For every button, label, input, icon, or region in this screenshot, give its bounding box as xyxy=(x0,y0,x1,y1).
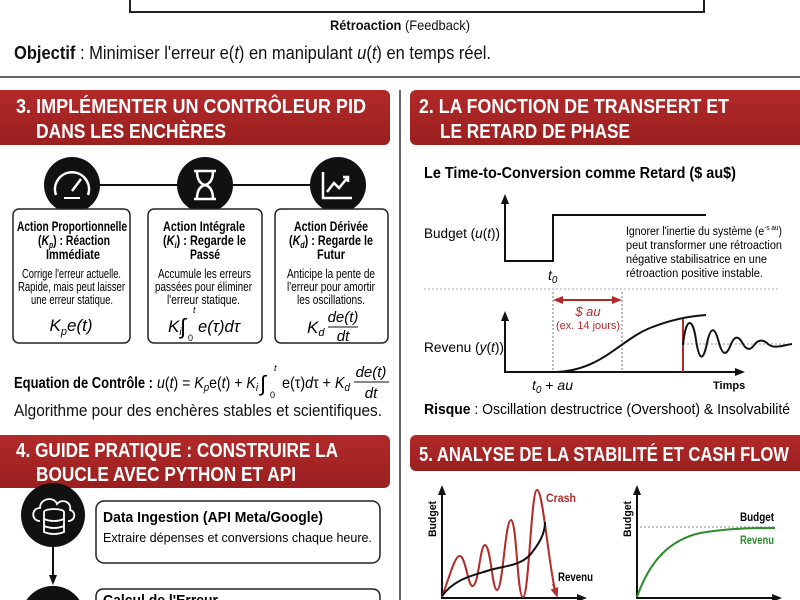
note text xyxy=(626,225,782,280)
card: integral: ) : Regarde le xyxy=(177,232,246,248)
icon: chart up xyxy=(310,157,366,213)
stable chart xyxy=(622,490,777,599)
equation of control: t) + K xyxy=(222,375,257,392)
revenue chart: t xyxy=(532,377,536,393)
card: integral: ∫ xyxy=(178,314,188,339)
heading: section 4: 4. GUIDE PRATIQUE : CONSTRUIRE LA xyxy=(16,440,338,462)
budget step chart xyxy=(424,199,706,286)
card: derivative: l'erreur pour amortir xyxy=(287,280,375,294)
heading: section 4: BOUCLE AVEC PYTHON ET API xyxy=(36,464,296,486)
card: proportional: K xyxy=(50,316,61,335)
arrow down xyxy=(52,547,54,580)
card: derivative: ) : Regarde le xyxy=(305,232,373,248)
card: proportional: e(t) xyxy=(67,316,92,335)
card: derivative: Futur xyxy=(317,246,345,262)
panel: stability analysis xyxy=(427,490,777,599)
equation of control: u(t) = K xyxy=(157,375,205,392)
card: integral: 0 xyxy=(188,333,193,343)
heading: section 2: LE RETARD DE PHASE xyxy=(440,121,630,143)
card: integral: Passé xyxy=(190,246,220,262)
card: derivative: Anticipe la pente de xyxy=(287,267,375,281)
card: data ingestion: Extraire dépenses et conversions chaque heure. xyxy=(103,530,372,545)
equation of control: i xyxy=(256,382,258,394)
card: proportional: p xyxy=(48,240,54,250)
equation of control: ∫ xyxy=(258,371,268,396)
card: proportional: p xyxy=(60,326,67,338)
card: proportional: Immédiate xyxy=(46,246,100,262)
equation of control: e(τ)dτ + K xyxy=(282,375,346,392)
card: derivative: (K xyxy=(289,232,303,248)
card: proportional xyxy=(13,209,130,343)
unstable chart: Crash xyxy=(546,491,576,505)
equation of control: p xyxy=(203,382,209,394)
card: integral xyxy=(148,209,262,343)
panel: PID controller xyxy=(13,157,388,345)
equation of control: t xyxy=(274,363,277,373)
card: data ingestion xyxy=(96,501,380,563)
card: derivative xyxy=(275,209,388,345)
revenue chart: 0 xyxy=(536,385,542,396)
heading: section 4 xyxy=(0,435,390,488)
card: proportional: Corrige l'erreur actuelle. xyxy=(22,267,121,281)
equation of control xyxy=(14,363,389,402)
card: derivative: K xyxy=(307,318,318,337)
unstable chart: Budget xyxy=(427,501,439,537)
card: proportional: Action Proportionnelle xyxy=(17,218,127,234)
card: proportional: (K xyxy=(38,232,52,248)
card: derivative: Action Dérivée xyxy=(294,218,368,234)
icon: cloud database xyxy=(21,483,85,547)
stable chart: Budget xyxy=(622,501,634,537)
stable chart: Revenu xyxy=(740,533,774,547)
card: integral: i xyxy=(175,240,177,250)
tagline: Algorithme pour des enchères stables et scientifiques. xyxy=(14,401,382,420)
panel: practical guide xyxy=(21,483,380,600)
revenue chart xyxy=(424,292,792,396)
unstable chart: Revenu xyxy=(558,570,593,584)
chart title: Le Time-to-Conversion comme Retard ($ au$) xyxy=(424,165,736,182)
card: proportional: ) : Réaction xyxy=(53,232,110,248)
heading: section 2 xyxy=(410,90,800,145)
revenue chart: (ex. 14 jours) xyxy=(556,320,620,332)
card: proportional: Rapide, mais peut laisser xyxy=(18,280,125,294)
budget step chart: Budget (u(t)) xyxy=(424,225,500,241)
top feedback box xyxy=(130,0,704,12)
objective text: Objectif : Minimiser l'erreur e(t) en manipulant u(t) en temps réel. xyxy=(14,43,491,63)
icon: hourglass xyxy=(177,157,233,213)
card: derivative: de(t) xyxy=(328,309,358,326)
note text: Ignorer l'inertie du système (e xyxy=(626,226,777,238)
budget step chart: t xyxy=(548,267,552,283)
card: integral: i xyxy=(179,327,182,338)
budget step chart: 0 xyxy=(552,275,558,286)
note text: rétroaction positive instable. xyxy=(626,268,763,280)
card: proportional: une erreur statique. xyxy=(31,293,113,307)
equation of control: d xyxy=(345,382,351,394)
heading: section 3 xyxy=(0,90,390,145)
heading: section 3: 3. IMPLÉMENTER UN CONTRÔLEUR PID xyxy=(16,94,366,118)
icon: gauge xyxy=(44,157,100,213)
unstable chart xyxy=(427,490,593,599)
feedback label: Rétroaction (Feedback) xyxy=(330,17,470,33)
note text: ) xyxy=(778,226,782,238)
note text: négative stabilisatrice en une xyxy=(626,254,767,266)
card: integral: K xyxy=(168,317,179,336)
note text: -s au xyxy=(764,225,779,232)
equation of control: dt xyxy=(365,385,378,402)
card: error calculation xyxy=(96,589,380,600)
card: derivative: les oscillations. xyxy=(297,293,365,307)
revenue chart: $ au xyxy=(574,304,601,319)
card: integral: Action Intégrale xyxy=(163,218,245,234)
equation of control: 0 xyxy=(270,390,275,400)
revenue chart: Revenu (y(t)) xyxy=(424,339,504,355)
card: integral: e(τ)dτ xyxy=(198,317,242,336)
stable chart: Budget xyxy=(740,510,774,524)
card: derivative: dt xyxy=(337,328,350,345)
revenue chart: + xyxy=(541,377,557,393)
equation of control: de(t) xyxy=(356,364,386,381)
heading: section 2: 2. LA FONCTION DE TRANSFERT ET xyxy=(419,96,729,118)
equation of control: Equation de Contrôle : xyxy=(14,375,153,392)
card: integral: t xyxy=(193,305,196,315)
card: integral: passées pour éliminer xyxy=(155,280,252,294)
card: integral: l'erreur statique. xyxy=(167,293,240,307)
panel: transfer function xyxy=(424,165,792,418)
heading: section 3: DANS LES ENCHÈRES xyxy=(36,120,226,143)
equation of control: e( xyxy=(209,375,222,392)
card: derivative: d xyxy=(318,327,325,339)
card: data ingestion: Data Ingestion (API Meta/Google) xyxy=(103,509,323,526)
icon: second step xyxy=(26,586,80,600)
card: integral: (K xyxy=(163,232,177,248)
heading: section 5 xyxy=(410,435,800,471)
card: derivative: d xyxy=(300,240,305,250)
note text: peut transformer une rétroaction xyxy=(626,240,782,252)
revenue chart: au xyxy=(557,377,573,393)
revenue chart: Timps xyxy=(713,380,745,392)
card: integral: Accumule les erreurs xyxy=(158,267,251,281)
